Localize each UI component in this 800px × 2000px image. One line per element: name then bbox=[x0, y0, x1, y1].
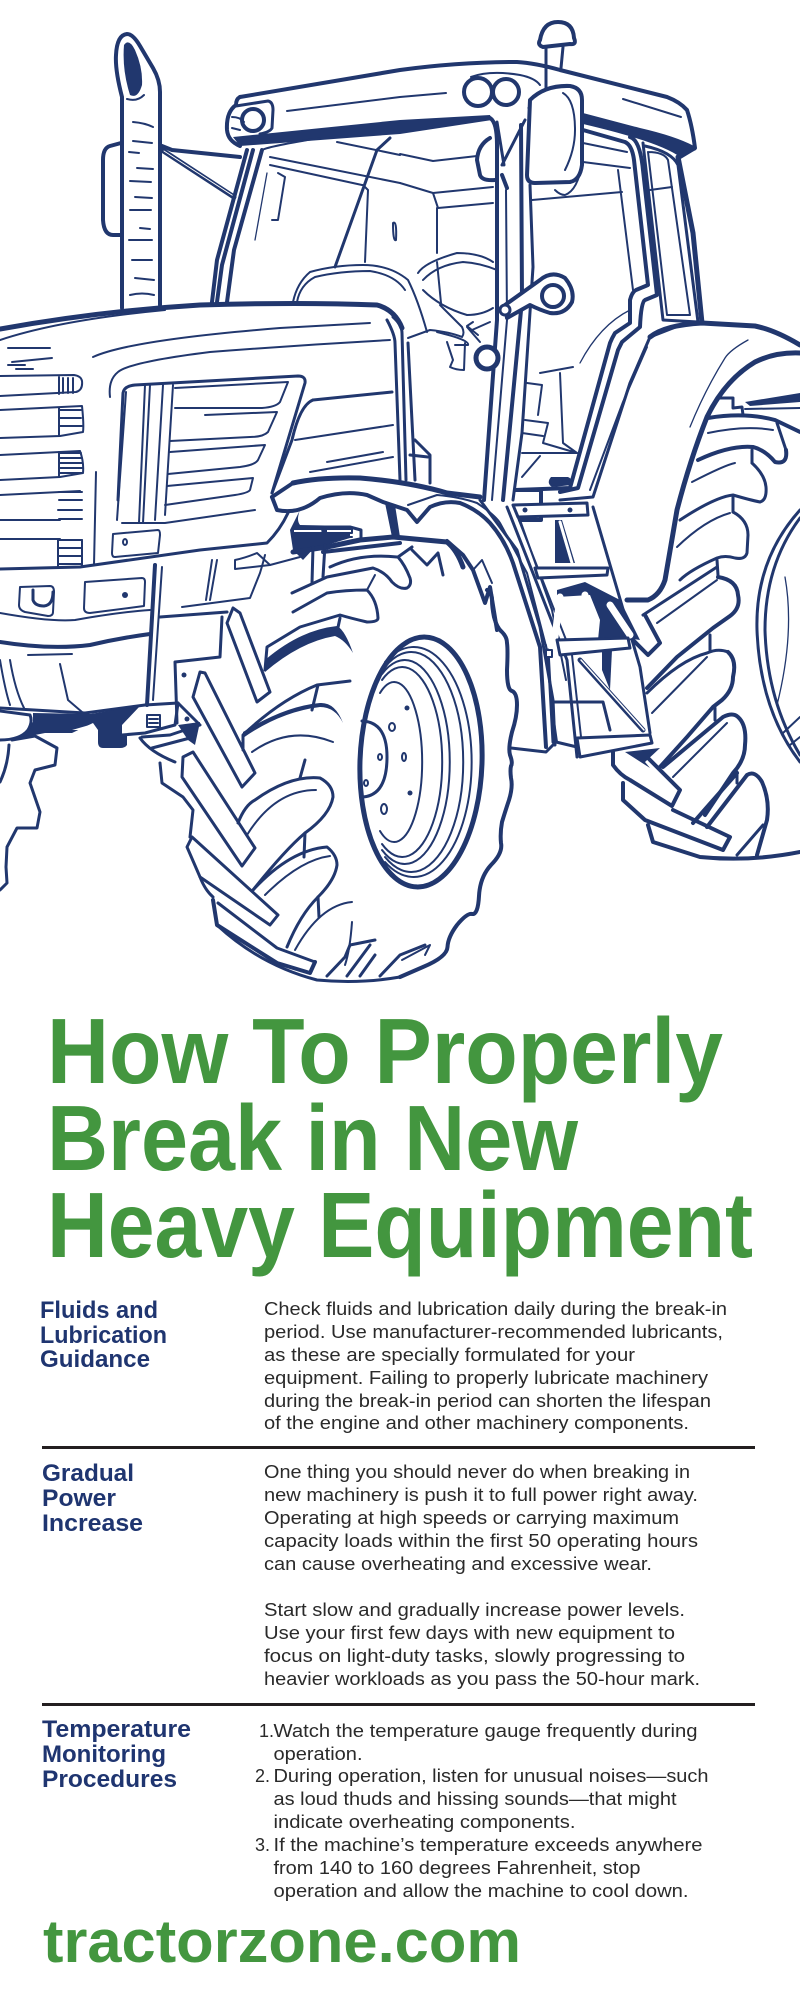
numbered list: temperature monitoring: Watch the temperature gauge frequently during bbox=[274, 1721, 698, 1741]
text block: fluids and lubrication: as these are specially formulated for your bbox=[264, 1345, 635, 1365]
cab pillars bbox=[212, 118, 702, 520]
text block: gradual power increase: One thing you should never do when breaking in bbox=[264, 1462, 690, 1482]
text block: fluids and lubrication: period. Use manufacturer-recommended lubricants, bbox=[264, 1322, 723, 1342]
panel: temperature monitoring bbox=[42, 1716, 708, 1901]
text block: fluids and lubrication: Check fluids and lubrication daily during the break-in bbox=[264, 1299, 727, 1319]
heading: gradual power increase bbox=[42, 1460, 143, 1537]
rear wheel rim bbox=[757, 510, 800, 762]
panel: gradual power increase bbox=[42, 1460, 700, 1689]
exhaust pipe bbox=[103, 34, 240, 308]
front lower body bbox=[0, 513, 288, 723]
heading: fluids and lubrication guidance: Lubrication bbox=[40, 1322, 167, 1349]
hood bbox=[0, 304, 430, 483]
panel: fluids and lubrication bbox=[40, 1297, 727, 1433]
numbered list: temperature monitoring: from 140 to 160 degrees Fahrenheit, stop bbox=[274, 1858, 640, 1878]
heading: gradual power increase: Power bbox=[42, 1485, 116, 1512]
heading: temperature monitoring procedures bbox=[42, 1716, 191, 1793]
rear fender bbox=[560, 323, 800, 600]
numbered list: temperature monitoring: 2. bbox=[255, 1766, 270, 1786]
numbered list: temperature monitoring: 3. bbox=[255, 1835, 270, 1855]
tractor illustration bbox=[0, 20, 800, 983]
numbered list: temperature monitoring: During operation, listen for unusual noises—such bbox=[274, 1766, 708, 1786]
numbered list: temperature monitoring: operation. bbox=[274, 1744, 362, 1764]
numbered list: temperature monitoring: as loud thuds and hissing sounds—that might bbox=[274, 1789, 676, 1809]
numbered list: temperature monitoring: indicate overheating components. bbox=[274, 1812, 576, 1832]
text block: gradual power increase: heavier workloads as you pass the 50-hour mark. bbox=[264, 1669, 700, 1689]
cab roof bbox=[227, 62, 696, 157]
text block: fluids and lubrication: equipment. Failing to properly lubricate machinery bbox=[264, 1368, 708, 1388]
front grille bars bbox=[0, 375, 96, 567]
title: How To Properly bbox=[47, 999, 723, 1103]
numbered list: temperature monitoring: If the machine’s temperature exceeds anywhere bbox=[274, 1835, 702, 1855]
text block: fluids and lubrication: of the engine and other machinery components. bbox=[264, 1413, 689, 1433]
text block: gradual power increase: new machinery is push it to full power right away. bbox=[264, 1485, 698, 1505]
heading: temperature monitoring procedures: Procedures bbox=[42, 1766, 177, 1793]
chassis underside bbox=[0, 703, 200, 762]
levers and knobs bbox=[476, 274, 573, 369]
text block: gradual power increase: can cause overheating and excessive wear. bbox=[264, 1554, 652, 1574]
numbered list: temperature monitoring bbox=[255, 1721, 708, 1901]
text block: gradual power increase: Use your first few days with new equipment to bbox=[264, 1623, 675, 1643]
front wheel rim bbox=[356, 635, 486, 889]
text block: gradual power increase bbox=[264, 1462, 700, 1689]
left front tire stub bbox=[0, 736, 57, 890]
heading: fluids and lubrication guidance: Guidance bbox=[40, 1346, 150, 1373]
front tire outline bbox=[160, 541, 517, 981]
heading: gradual power increase: Gradual bbox=[42, 1460, 134, 1487]
title: Break in New bbox=[47, 1086, 579, 1190]
numbered list: temperature monitoring: 1. bbox=[259, 1721, 274, 1741]
text block: gradual power increase: focus on light-duty tasks, slowly progressing to bbox=[264, 1646, 685, 1666]
front tire tread lugs bbox=[182, 543, 425, 976]
cab windows and interior bbox=[255, 138, 672, 487]
heading: gradual power increase: Increase bbox=[42, 1510, 143, 1537]
text block: gradual power increase: Start slow and gradually increase power levels. bbox=[264, 1600, 685, 1620]
heading: temperature monitoring procedures: Temperature bbox=[42, 1716, 191, 1743]
grille panel bbox=[117, 376, 393, 523]
rear tire lugs bbox=[613, 393, 800, 859]
antenna and mirror bbox=[527, 22, 582, 195]
text block: fluids and lubrication: during the break-in period can shorten the lifespan bbox=[264, 1391, 711, 1411]
website footer: tractorzone.com bbox=[43, 1908, 521, 1975]
cab access ladder bbox=[507, 503, 652, 757]
heading: fluids and lubrication guidance: Fluids and bbox=[40, 1297, 158, 1324]
text block: gradual power increase: capacity loads within the first 50 operating hours bbox=[264, 1531, 698, 1551]
title bbox=[47, 999, 753, 1277]
heading: fluids and lubrication guidance bbox=[40, 1297, 167, 1373]
heading: temperature monitoring procedures: Monitoring bbox=[42, 1741, 166, 1768]
text block: gradual power increase: Operating at high speeds or carrying maximum bbox=[264, 1508, 679, 1528]
text block: fluids and lubrication bbox=[264, 1299, 727, 1433]
front fender bbox=[270, 478, 555, 752]
numbered list: temperature monitoring: operation and allow the machine to cool down. bbox=[274, 1881, 688, 1901]
